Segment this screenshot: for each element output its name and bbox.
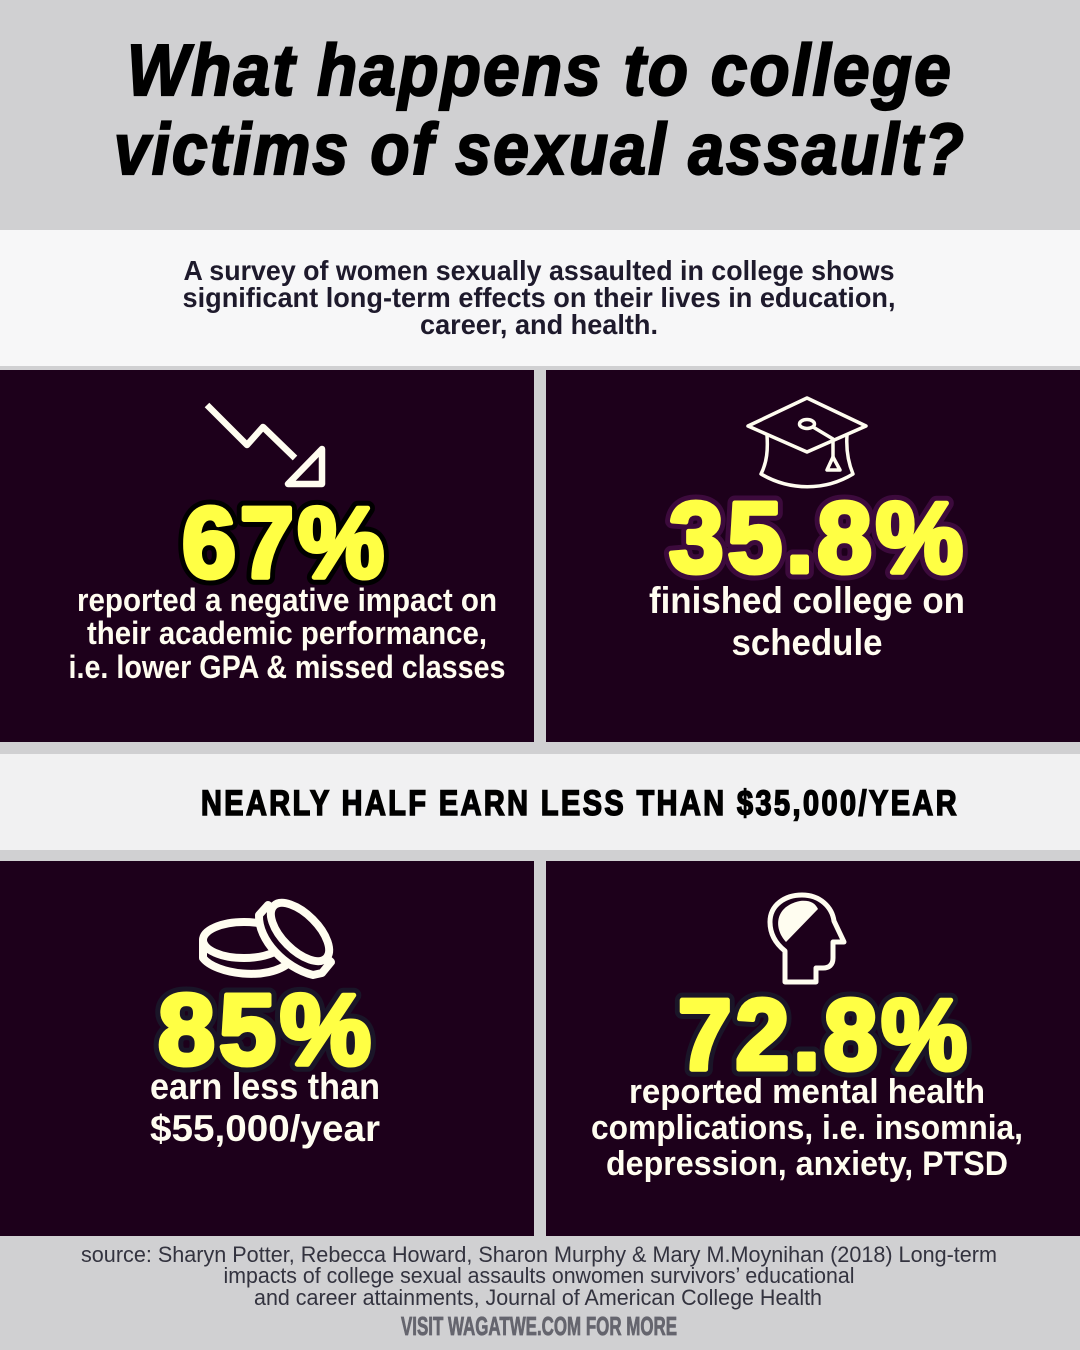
icon: head xyxy=(770,895,844,982)
title: What happens to college xyxy=(127,31,953,111)
source text xyxy=(81,1242,997,1310)
footer call to action: VISIT WAGATWE.COM FOR MORE xyxy=(401,1311,677,1341)
source text: source: Sharyn Potter, Rebecca Howard, Sharon Murphy & Mary M.Moynihan (2018) Long-term xyxy=(81,1242,997,1267)
description: earn less: $55,000/year xyxy=(150,1108,380,1149)
title: victims of sexual assault? xyxy=(114,110,966,190)
source text: impacts of college sexual assaults onwomen survivors’ educational xyxy=(224,1263,854,1288)
panel: intro text band: career, and health. xyxy=(420,309,658,340)
statistic: 67%: 67% xyxy=(182,487,388,599)
statistic: 67%: 67% xyxy=(182,487,388,599)
statistic: 85%: 85% xyxy=(158,974,375,1086)
description: academic impact: their academic performance, xyxy=(87,615,487,651)
panel: earnings heading band xyxy=(0,754,1080,850)
description: academic impact xyxy=(68,582,506,685)
panel: intro text band xyxy=(0,230,1080,366)
description: finished on schedule xyxy=(649,580,965,663)
panel: intro text band: A survey of women sexually assaulted in college shows xyxy=(184,255,894,286)
panel: finished college xyxy=(546,370,1080,742)
icon: graduation cap xyxy=(748,398,866,487)
panel: intro text band: significant long-term effects on their lives in education, xyxy=(182,282,896,313)
description: mental health: complications, i.e. insomnia, xyxy=(591,1109,1023,1147)
statistic: 72.8%: 72.8% xyxy=(678,979,971,1091)
icon: declining arrow xyxy=(207,405,322,484)
description: academic impact: i.e. lower GPA & missed classes xyxy=(68,649,506,685)
description: earn less xyxy=(150,1066,380,1149)
statistic: 85%: 85% xyxy=(158,974,375,1086)
panel: mental health xyxy=(546,861,1080,1236)
description: finished on schedule: finished college on xyxy=(649,580,965,621)
statistic: 35.8%: 35.8% xyxy=(669,482,967,594)
description: mental health: depression, anxiety, PTSD xyxy=(606,1145,1008,1183)
description: mental health xyxy=(591,1073,1023,1183)
statistic: 35.8%: 35.8% xyxy=(669,482,967,594)
panel: earnings xyxy=(0,861,534,1236)
description: earn less: earn less than xyxy=(150,1066,380,1107)
panel: academic performance xyxy=(0,370,534,742)
statistic: 72.8%: 72.8% xyxy=(678,979,971,1091)
description: academic impact: reported a negative impact on xyxy=(77,582,497,618)
description: finished on schedule: schedule xyxy=(732,622,882,663)
description: mental health: reported mental health xyxy=(629,1073,985,1111)
icon: coins xyxy=(203,893,339,975)
source text: and career attainments, Journal of American College Health xyxy=(254,1285,822,1310)
title xyxy=(114,31,966,190)
